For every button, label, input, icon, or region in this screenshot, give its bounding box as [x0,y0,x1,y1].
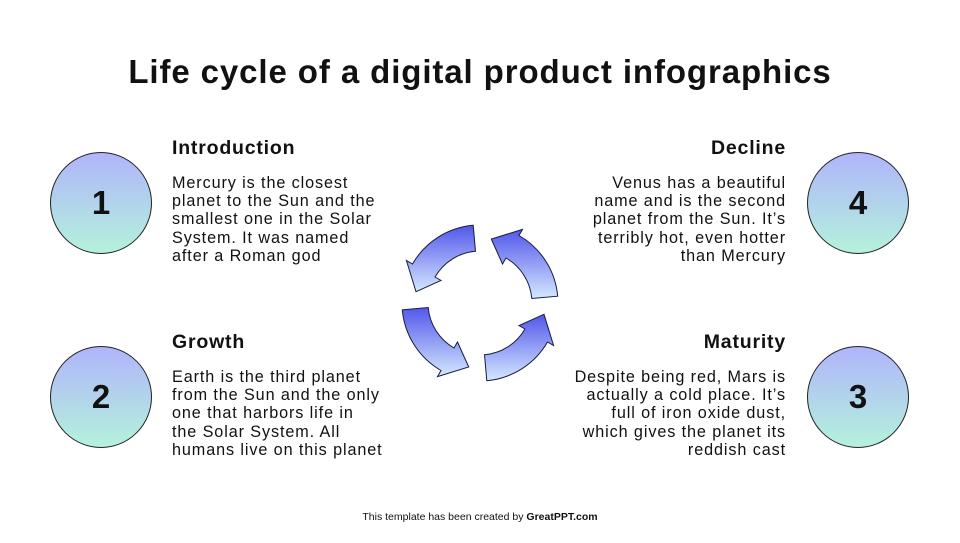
circle 1: 1 [92,184,110,221]
text: growth: Growth [172,331,245,353]
text: introduction: after a Roman god [172,247,321,265]
text: introduction: planet to the Sun and the [172,192,375,210]
circle 4 [807,152,909,254]
text: introduction: smallest one in the Solar [172,210,372,228]
text: maturity: which gives the planet its [583,423,786,441]
text: maturity [575,331,786,459]
text: decline: planet from the Sun. It’s [593,210,786,228]
arrow top-right [491,229,558,298]
circle 4: 4 [849,184,867,221]
text: decline [593,137,786,265]
text: introduction: System. It was named [172,229,349,247]
text: growth: Earth is the third planet [172,368,361,386]
circle 3: 3 [849,378,867,415]
text: decline: name and is the second [594,192,786,210]
circle 2: 2 [92,378,110,415]
arrow bottom-right [484,314,554,381]
footer: This template has been created by GreatPPT.com [362,511,598,523]
arrow top-left [406,225,476,292]
text: growth [172,331,383,459]
arrow bottom-left [402,308,469,377]
text: growth: humans live on this planet [172,441,383,459]
text: decline: than Mercury [681,247,786,265]
text: maturity: Despite being red, Mars is [575,368,786,386]
text: growth: the Solar System. All [172,423,340,441]
text: decline: terribly hot, even hotter [598,229,786,247]
text: introduction: Mercury is the closest [172,174,348,192]
text: growth: from the Sun and the only [172,386,380,404]
text: maturity: Maturity [704,331,786,353]
circle 3 [807,346,909,448]
text: introduction [172,137,375,265]
circle 2 [50,346,152,448]
text: maturity: actually a cold place. It’s [587,386,786,404]
text: decline: Decline [711,137,786,159]
text: maturity: reddish cast [688,441,786,459]
circle 1 [50,152,152,254]
text: maturity: full of iron oxide dust, [611,404,786,422]
text: growth: one that harbors life in [172,404,354,422]
text: introduction: Introduction [172,137,295,159]
text: decline: Venus has a beautiful [612,174,786,192]
title: Life cycle of a digital product infographics [128,53,832,90]
